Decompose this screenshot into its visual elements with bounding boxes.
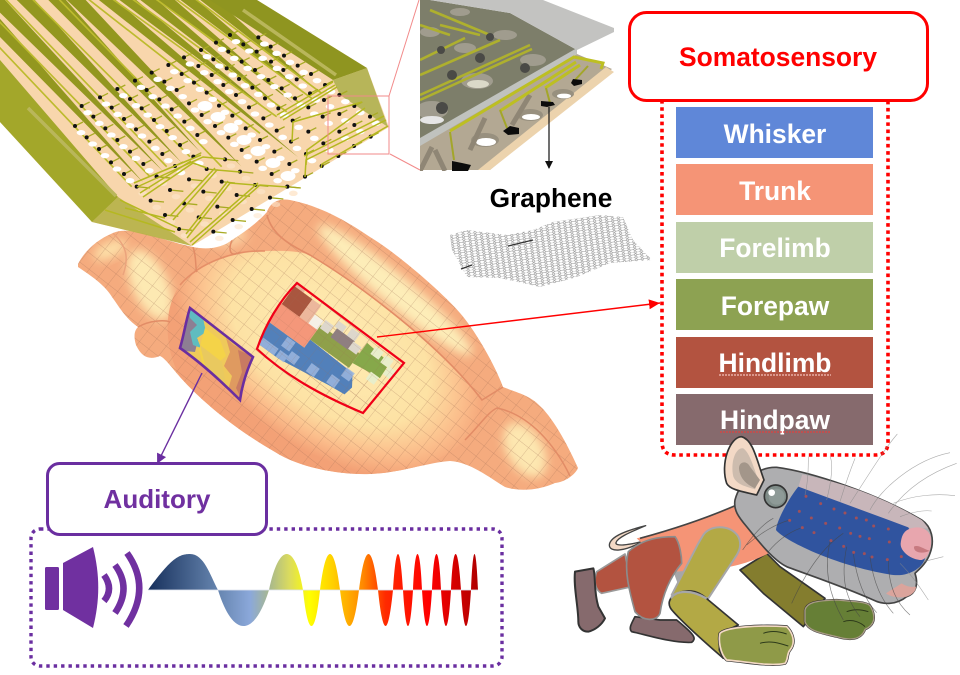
array olive borders <box>0 0 388 246</box>
rat thigh <box>627 537 682 619</box>
rat whisker barrel region <box>776 487 925 575</box>
rat body map <box>575 434 957 664</box>
rat hindlimb lower <box>595 554 632 593</box>
heading: Graphene: Graphene <box>490 183 612 213</box>
legend item: Forelimb: Forelimb <box>719 233 831 263</box>
rat head <box>735 467 932 603</box>
arrow: brain to auditory <box>158 373 202 462</box>
array substrate <box>0 0 389 246</box>
legend: somatosensory regions <box>676 107 873 445</box>
rat near forelimb upper <box>672 527 740 598</box>
legend item: Whisker <box>676 107 873 158</box>
legend item: Trunk <box>676 164 873 215</box>
legend item: Hindpaw: Hindpaw <box>720 405 830 435</box>
rat whisker follicles <box>788 495 903 561</box>
arrow: brain to somatosensory <box>377 303 660 337</box>
rat far forepaw <box>805 600 874 639</box>
panel: auditory dotted frame <box>31 529 502 666</box>
rat ear <box>725 437 764 495</box>
sound wave with rising frequency <box>148 554 478 626</box>
inset middle plate holes and traces <box>416 8 546 124</box>
legend item: Hindpaw <box>676 394 873 445</box>
inset base layer <box>420 54 612 170</box>
icon: speaker <box>45 547 139 628</box>
purple mapping region on brain <box>178 306 255 403</box>
rat far forelimb <box>740 553 825 627</box>
inset middle plate <box>420 0 577 140</box>
inset silver strip <box>420 48 577 146</box>
graphene sheet <box>450 215 652 287</box>
red zoom indicator box <box>328 0 420 170</box>
heading: Somatosensory: Somatosensory <box>679 42 877 72</box>
rat mouth <box>886 583 916 597</box>
array traces <box>0 0 322 187</box>
legend item: Trunk: Trunk <box>739 176 811 206</box>
rat near hindpaw <box>575 568 605 632</box>
heading: Auditory <box>48 464 266 534</box>
inset top grey plate <box>430 0 614 50</box>
rat near forelimb lower <box>669 591 738 658</box>
inset yellow trace and chips <box>450 57 603 171</box>
inset: 3D layered device <box>416 0 614 171</box>
panel: somatosensory dotted frame <box>662 100 888 455</box>
rat far hindpaw <box>630 617 694 642</box>
red mapping region on brain <box>256 282 406 414</box>
legend item: Forepaw <box>676 279 873 330</box>
rat nose <box>901 527 931 560</box>
heading: Auditory: Auditory <box>104 484 211 514</box>
inset base edge <box>478 67 614 170</box>
rat tail <box>609 526 646 550</box>
large central holes <box>198 101 296 181</box>
rat near forepaw <box>719 626 793 664</box>
legend item: Whisker: Whisker <box>724 119 826 149</box>
heading: Somatosensory <box>630 12 928 100</box>
legend item: Hindlimb: Hindlimb <box>719 348 831 378</box>
rat trunk <box>637 505 768 572</box>
brain illustration <box>78 200 578 490</box>
rat eye <box>764 485 787 508</box>
electrode array <box>0 0 389 246</box>
rat snout top <box>798 474 928 528</box>
legend item: Forelimb <box>676 222 873 273</box>
array yellow routing lines <box>105 82 388 245</box>
rat belly <box>673 571 685 583</box>
rat whiskers <box>805 434 957 600</box>
arrow: inset to graphene <box>548 107 550 168</box>
legend item: Forepaw: Forepaw <box>721 291 830 321</box>
inset holes in base <box>420 89 574 171</box>
legend item: Hindlimb <box>676 337 873 388</box>
array electrode pads and holes <box>75 35 371 232</box>
